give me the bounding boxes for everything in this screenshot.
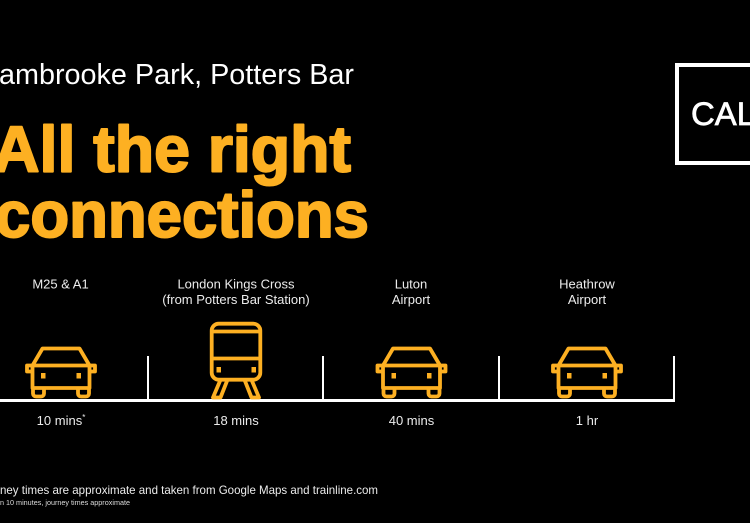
destination: Luton Airport: Luton [395, 276, 427, 292]
heading: All the right [0, 112, 351, 186]
destination: Heathrow Airport: Heathrow [559, 276, 615, 292]
time: 1 hr: 1 hr [576, 413, 599, 428]
destination: Heathrow Airport: Airport [568, 292, 607, 307]
icon: car [553, 348, 621, 396]
time: 10 mins: 10 mins [37, 413, 82, 428]
destination: M25 and A1: M25 & A1 [32, 276, 89, 292]
icon: car [378, 348, 446, 396]
footnote: ney times are approximate and taken from Google Maps and trainline.com [0, 483, 378, 497]
icon: train [212, 324, 260, 398]
subtitle: ambrooke Park, Potters Bar [0, 59, 355, 91]
time: 10 mins: * [82, 413, 85, 422]
heading: connections [0, 178, 369, 251]
small footnote: n 10 minutes, journey times approximate [0, 498, 130, 507]
destination: Luton Airport: Airport [392, 292, 431, 307]
time: 18 mins: 18 mins [213, 413, 259, 428]
destination: London Kings Cross: London Kings Cross [177, 276, 295, 292]
logo [677, 65, 750, 163]
destination: London Kings Cross: (from Potters Bar Station) [162, 292, 310, 307]
time: 40 mins: 40 mins [389, 413, 435, 428]
heading [0, 112, 369, 251]
timeline [0, 356, 675, 402]
icon: car [27, 348, 95, 396]
